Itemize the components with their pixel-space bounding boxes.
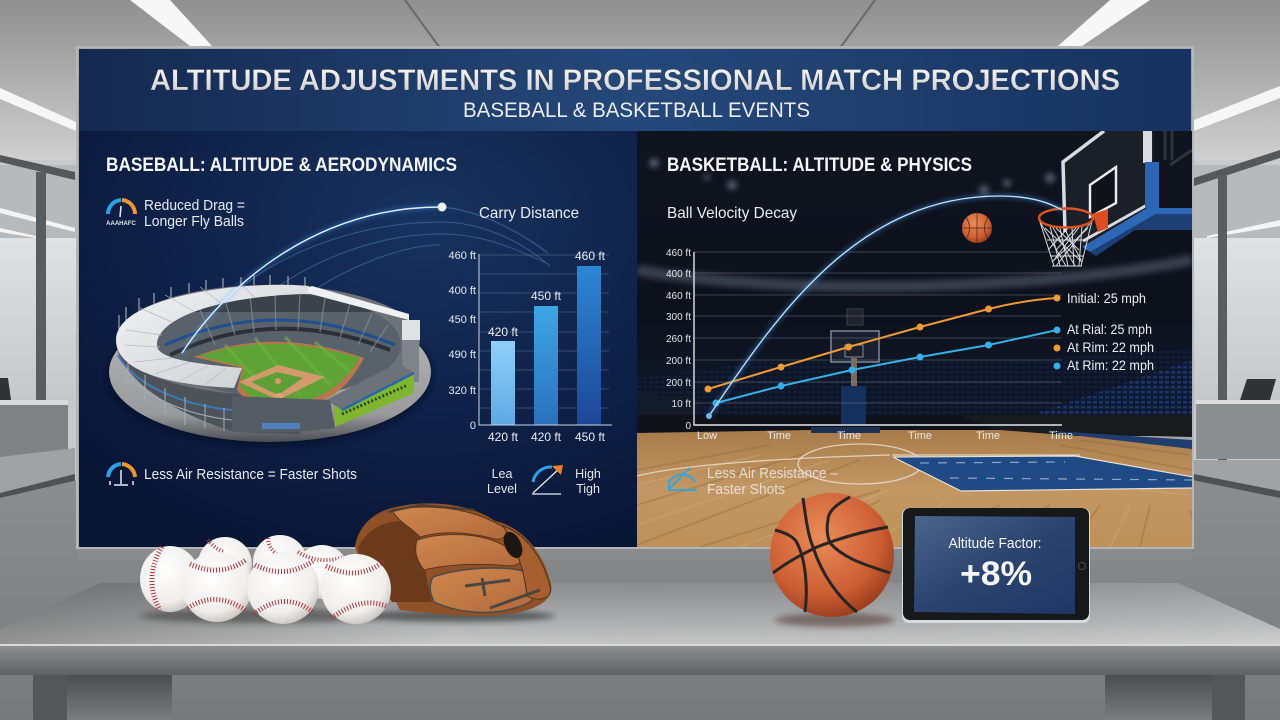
- stadium light poles: [118, 275, 306, 330]
- bar chart: carry distance: 490 ft: [448, 349, 476, 361]
- glass wall left: [0, 160, 78, 490]
- text: less air resistance: Less Air Resistance = Faster Shots: [144, 466, 357, 483]
- line chart: ball velocity: Time: [767, 430, 791, 442]
- baseball ball marker: [438, 202, 446, 212]
- subtitle: BASEBALL & BASKETBALL EVENTS: [463, 99, 810, 122]
- backboard and hoop: [1039, 131, 1193, 266]
- bar chart: carry distance: 460 ft: [575, 249, 606, 263]
- legend: At Rial: 25 mph: [1067, 321, 1152, 337]
- line chart: ball velocity: [666, 248, 1154, 442]
- baseball: front center: [247, 552, 319, 624]
- text: reduced drag: Longer Fly Balls: [144, 213, 244, 230]
- bar chart: carry distance: 0: [470, 420, 476, 432]
- text: faster shots: Less Air Resistance –: [707, 465, 839, 482]
- text: reduced drag: [145, 199, 244, 229]
- line chart: ball velocity: Time: [837, 430, 861, 442]
- altitude legend: Tigh: [576, 482, 600, 496]
- stadium illustration: [107, 275, 433, 446]
- icon: altitude arrow: [532, 465, 563, 494]
- icon: altitude gauge: AAAHAFC: [106, 221, 136, 227]
- bar chart: carry distance: 400 ft: [448, 285, 476, 297]
- panel: header band: [79, 49, 1191, 131]
- table: [0, 583, 1280, 720]
- bar chart: carry distance: [448, 249, 612, 444]
- stadium field: [194, 342, 364, 400]
- glove fingers: [392, 507, 506, 539]
- stadium seating bowl: [157, 312, 401, 394]
- line chart: ball velocity: 400 ft: [666, 269, 691, 280]
- hoop net: [1040, 221, 1092, 266]
- bar chart: carry distance: 460 ft: [448, 250, 476, 262]
- stadium right stand: [334, 373, 414, 427]
- line chart: ball velocity: 300 ft: [666, 312, 691, 323]
- faint ball trajectories: [242, 207, 550, 288]
- line chart: ball velocity: 10 ft: [672, 399, 691, 410]
- line chart: ball velocity: 460 ft: [666, 248, 691, 259]
- line chart: ball velocity: Low: [697, 430, 717, 442]
- arena upper ring: [637, 260, 1192, 286]
- heading: baseball: BASEBALL: ALTITUDE & AERODYNAMICS: [106, 154, 457, 176]
- distant hoop: [831, 309, 879, 424]
- series: orange: [704, 294, 1060, 392]
- bar chart: carry distance: 420 ft: [488, 325, 519, 339]
- bar chart: carry distance: 450 ft: [575, 430, 606, 444]
- bar chart: carry distance: 450 ft: [448, 314, 476, 326]
- altitude legend: Lea: [492, 467, 512, 481]
- stadium roof: [116, 285, 309, 388]
- court key: [893, 456, 1193, 491]
- altitude legend: Level: [487, 482, 517, 496]
- label: carry distance: Carry Distance: [479, 205, 579, 222]
- label: ball velocity decay: Ball Velocity Decay: [667, 205, 797, 222]
- altitude legend: [487, 465, 601, 496]
- basketball on table: [770, 493, 895, 627]
- glove pocket: [358, 521, 432, 602]
- bar chart: carry distance: 420 ft: [531, 430, 562, 444]
- arena lights: [649, 158, 1116, 195]
- line chart: ball velocity: Time: [1049, 430, 1073, 442]
- ceiling: [0, 0, 1280, 170]
- altitude legend: High: [575, 467, 601, 481]
- floor: [0, 480, 1280, 720]
- basketball in flight: [962, 213, 992, 243]
- tablet readout: +8%: [960, 555, 1032, 593]
- baseballs: [140, 535, 391, 624]
- legend: [1054, 290, 1154, 373]
- line chart: ball velocity: 200 ft: [666, 356, 691, 367]
- icon: air resistance gauge: [108, 464, 135, 485]
- icon: faster shots gauge: [668, 468, 697, 490]
- panel: baseball: [79, 131, 637, 547]
- baseball: front left: [182, 552, 252, 622]
- tablet: [902, 508, 1090, 623]
- table legs: [33, 675, 1245, 720]
- panel: basketball: [637, 131, 1200, 547]
- arena seats: [637, 348, 1192, 437]
- line chart: ball velocity: 0: [685, 421, 691, 432]
- baseball glove: [355, 503, 555, 622]
- baseball: back row: [198, 535, 349, 599]
- baseball: front right: [321, 554, 391, 624]
- stadium outer ring: [116, 285, 420, 395]
- legend: At Rim: 22 mph: [1067, 339, 1154, 355]
- hardwood court: [637, 427, 1200, 547]
- glass wall right: [1192, 160, 1280, 490]
- shot arc: [706, 196, 1062, 419]
- line chart: ball velocity: Time: [908, 430, 932, 442]
- hoop rim: [1039, 208, 1093, 228]
- court lines: [637, 444, 1080, 484]
- bar chart: carry distance: 420 ft: [488, 430, 519, 444]
- text: faster shots: [707, 465, 839, 498]
- legend: Initial: 25 mph: [1067, 290, 1146, 306]
- tablet readout: Altitude Factor:: [948, 536, 1042, 552]
- ball flight path: [182, 207, 441, 353]
- line chart: ball velocity: 260 ft: [666, 334, 691, 345]
- series: blue: [712, 326, 1060, 406]
- line chart: ball velocity: 460 ft: [666, 291, 691, 302]
- legend: At Rim: 22 mph: [1067, 357, 1154, 373]
- icon: altitude gauge: [106, 200, 136, 227]
- line chart: ball velocity: 200 ft: [666, 378, 691, 389]
- bar chart: carry distance: 320 ft: [448, 385, 476, 397]
- baseball: back left: [140, 546, 200, 612]
- text: faster shots: Faster Shots: [707, 481, 785, 498]
- heading: basketball: BASKETBALL: ALTITUDE & PHYSICS: [667, 154, 972, 176]
- text: reduced drag: Reduced Drag =: [144, 197, 245, 214]
- wall display screen: [77, 47, 1200, 548]
- bar chart: carry distance: 450 ft: [531, 289, 562, 303]
- tablet readout: [948, 536, 1042, 593]
- stadium infield: [239, 365, 325, 400]
- title: ALTITUDE ADJUSTMENTS IN PROFESSIONAL MATCH PROJECTIONS: [150, 64, 1120, 97]
- stadium lower facade: [116, 342, 300, 434]
- line chart: ball velocity: Time: [976, 430, 1000, 442]
